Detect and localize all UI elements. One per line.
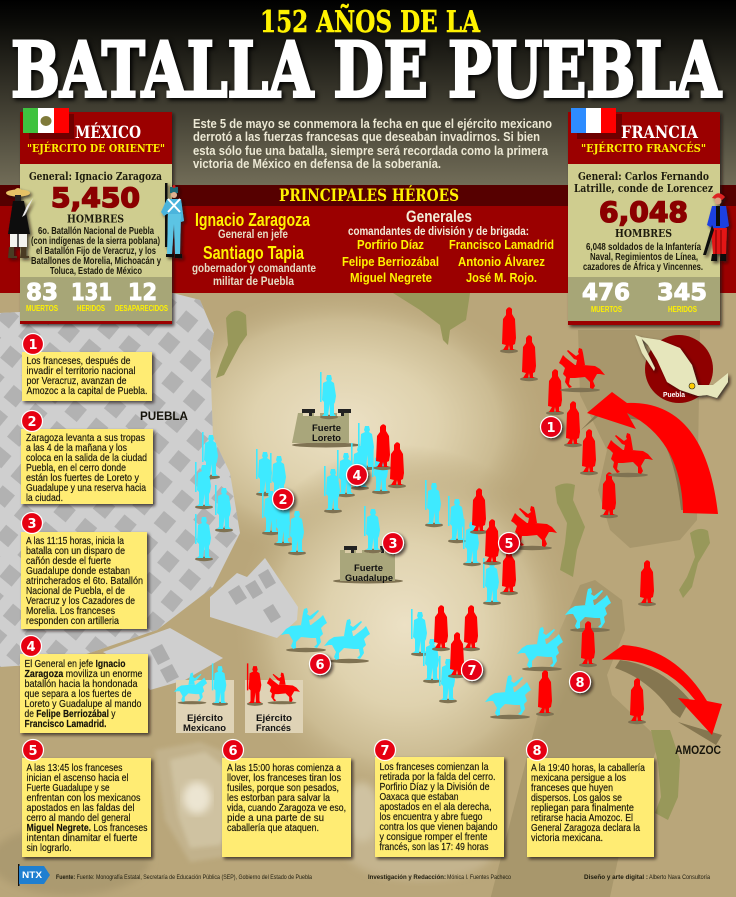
arrow: French advance (587, 392, 718, 514)
panel: México (6, 108, 184, 324)
heroes left column: gobernador y comandante (192, 263, 316, 275)
step 6: vida, cuando Zaragoza ve eso, (227, 802, 346, 814)
step 6: caballería que ataquen. (227, 822, 319, 834)
troop count: 6,048 (599, 196, 688, 228)
green vegetation patches (216, 293, 710, 820)
map number markers: 7 (467, 664, 477, 679)
step 3: Veracruz y los Cazadores de (26, 595, 135, 607)
map number markers: 5 (504, 537, 514, 552)
mini map: Puebla location (635, 335, 728, 403)
step 6: llover, los franceses tiran los (227, 772, 341, 784)
panel: México: HOMBRES (67, 212, 124, 226)
step 6: pide a una parte de su (227, 812, 324, 824)
step 3: batalla con un disparo de (26, 545, 125, 557)
step 4: Zaragoza moviliza un enorme (24, 668, 143, 680)
Francia heading (581, 123, 706, 155)
fort: Loreto (292, 409, 360, 448)
casualty stats: 12 (128, 280, 157, 306)
step 4: Francisco Lamadrid. (24, 718, 107, 730)
step 8: retirarse hacia Amozoc. El (531, 812, 633, 824)
step 4: 4 (26, 640, 36, 655)
step 4: Loreto y Guadalupe al mando (24, 698, 142, 710)
heroes left column: Santiago Tapia (203, 243, 305, 263)
mini map: Puebla location: Puebla (663, 392, 685, 399)
step 4 (20, 636, 148, 733)
legend: Ejército Francés: Ejército (256, 713, 292, 724)
Francia heading: FRANCIA (621, 123, 699, 143)
step 1: invadir el territorio nacional (26, 365, 136, 377)
panel: principales héroes band (0, 185, 736, 293)
step 7: los encuentra y abre fuego (380, 811, 483, 823)
step 5: 5 (28, 744, 38, 759)
step 7: 7 (380, 744, 390, 759)
step 5: apostados en las faldas del (26, 802, 134, 814)
fort: Guadalupe: Fuerte (354, 563, 383, 574)
battalion description: Batallones de Morelia, Michoacán y (31, 255, 161, 267)
battalion description: el Batallón Fijo de Veracruz, y los (36, 245, 156, 257)
French army figures (374, 307, 656, 724)
México heading: "EJÉRCITO DE ORIENTE" (27, 141, 165, 155)
fort: Loreto: Fuerte (312, 423, 341, 434)
map number markers: 8 (575, 676, 585, 691)
regiment description: Naval, Regimientos de Línea, (590, 251, 698, 263)
step 4: que separa a los fuertes de (24, 688, 132, 700)
step 3: Guadalupe donde estaban (26, 565, 130, 577)
icon: French flag (571, 108, 622, 139)
step 4: de Felipe Berriozábal y (24, 708, 116, 720)
step 2 (21, 410, 153, 504)
generals list: Generales (406, 207, 472, 226)
Mexican army figures (195, 372, 611, 719)
troop count: 5,450 (51, 183, 140, 214)
step 5 (22, 740, 151, 857)
icon: Mexican infantry soldier (161, 183, 184, 258)
battalion description (31, 225, 161, 277)
step 5: Fuerte Guadalupe y se (26, 782, 110, 794)
step 6: fusiles, porque son pesados, (227, 782, 339, 794)
casualty stats: DESAPARECIDOS (115, 304, 169, 313)
step 1: 1 (28, 338, 38, 353)
map number markers: 3 (388, 537, 398, 552)
step 8: 8 (532, 744, 542, 759)
step 7 (374, 740, 504, 857)
generals list: Antonio Álvarez (458, 254, 545, 269)
heading: principales héroes: PRINCIPALES HÉROES (279, 185, 459, 206)
step 2: coloca en la salida de la ciudad (26, 452, 147, 464)
step 3: Nacional de Puebla, el de (26, 585, 125, 597)
title: 152 AÑOS DE LA (260, 4, 481, 40)
battalion description: Toluca, Estado de México (50, 265, 142, 277)
icon: Mexican flag (23, 108, 74, 139)
fort: Guadalupe (333, 546, 403, 584)
step 4: batallón hacia la hondonada (24, 678, 138, 690)
panel: Francia (568, 108, 729, 325)
credits footer: Investigación y Redacción: (368, 875, 446, 881)
intro text: derrotó a las fuerzas francesas que deseaban invadirnos. Si bien (193, 129, 540, 144)
legend: Ejército Mexicano: Ejército (187, 713, 223, 724)
intro text: esta sólo fue una batalla, siempre será recordada como la primera (193, 143, 549, 158)
legend: Ejército Mexicano (174, 663, 234, 734)
legend: Ejército Francés: Francés (256, 723, 291, 734)
French general (574, 169, 713, 195)
battalion description: (con indígenas de la sierra poblana) (31, 235, 160, 247)
heroes left column (192, 210, 316, 288)
map number markers: 6 (315, 658, 325, 673)
casualty stats: 476 (582, 280, 630, 306)
arrow shadows (581, 405, 722, 745)
heroes left column: militar de Puebla (213, 276, 295, 288)
generals list: José M. Rojo. (466, 270, 537, 285)
casualty stats: 131 (71, 280, 112, 306)
map label: Amozoc: AMOZOC (675, 743, 721, 757)
casualty stats: HERIDOS (77, 304, 106, 313)
step 8: A la 19:40 horas, la caballería (531, 762, 645, 774)
México heading (27, 122, 165, 155)
casualty stats (26, 280, 169, 313)
credits footer: Fuente: Fuente: Monografía Estatal, Secretaría de Educación Pública (SEP), Gobierno del Estado de Puebla (56, 875, 313, 881)
generals list (342, 207, 554, 285)
fort: Guadalupe: Guadalupe (345, 573, 393, 584)
step 8 (526, 740, 654, 857)
arrow: French retreat to Amozoc (602, 645, 722, 735)
step 3: A las 11:15 horas, inicia la (26, 535, 124, 547)
step 4: El General en jefe Ignacio (24, 658, 126, 670)
step 7: Los franceses comienzan la (380, 761, 489, 773)
step 3: cañón desde el fuerte (26, 555, 111, 567)
intro text (193, 116, 552, 171)
step 2: 2 (27, 415, 37, 430)
step 1: por Veracruz, avanzan de (26, 375, 127, 387)
panel: Francia: HOMBRES (615, 226, 672, 240)
step 7: Porfirio Díaz y la División de (380, 781, 490, 793)
logo: NTX: NTX (22, 870, 42, 880)
step 3 (21, 512, 147, 629)
heroes left column: General en jefe (218, 229, 288, 241)
step 7: apostados en el ala derecha, (380, 801, 492, 813)
step 7: Oaxaca que estaban (380, 791, 459, 803)
Francia heading: "EJÉRCITO FRANCÉS" (581, 141, 706, 155)
step 8: mexicana persigue a los (531, 772, 626, 784)
casualty stats: 345 (657, 280, 707, 306)
step 8: victoria mexicana. (531, 832, 603, 844)
step 5: Miguel Negrete. Los franceses (26, 822, 148, 834)
intro text: Este 5 de mayo se conmemora la fecha en que el ejército mexicano (193, 116, 552, 131)
credits footer (56, 875, 711, 881)
México heading: MÉXICO (75, 122, 141, 143)
step 8: franceses que huyen (531, 782, 613, 794)
map number markers: 4 (352, 469, 362, 484)
fort: Loreto: Loreto (312, 433, 341, 444)
panel: México: General: Ignacio Zaragoza (29, 169, 162, 183)
regiment description (583, 241, 703, 273)
step 7: y consigue romper el frente (380, 831, 488, 843)
battalion description: 6o. Batallón Nacional de Puebla (38, 225, 154, 237)
step 1: Los franceses, después de (26, 355, 131, 367)
generals list: Miguel Negrete (350, 270, 432, 285)
generals list: Francisco Lamadrid (449, 237, 554, 252)
step 6: A las 15:00 horas comienza a (227, 762, 341, 774)
city of Puebla blocks (0, 293, 298, 690)
step 5: intentan dinamitar el fuerte (26, 832, 138, 844)
generals list: Felipe Berriozábal (342, 254, 439, 269)
map label: Puebla: PUEBLA (140, 409, 188, 423)
step 1 (22, 334, 152, 401)
step 5: cerro al mando del general (26, 812, 130, 824)
step 2: Puebla, en el cerro donde (26, 462, 126, 474)
map number markers (272, 416, 590, 692)
step 6: 6 (228, 744, 238, 759)
regiment description: 6,048 soldados de la Infantería (586, 241, 701, 253)
generals list: Porfirio Díaz (357, 237, 424, 252)
step 6 (222, 740, 351, 857)
step 3: atrincherados el 6to. Batallón (26, 575, 143, 587)
step 8: dispersos. Los galos se (531, 792, 622, 804)
casualty stats: 83 (26, 280, 58, 306)
map number markers: 1 (546, 421, 556, 436)
step 3: responden con artilleria (26, 615, 119, 627)
heroes left column: Ignacio Zaragoza (195, 210, 311, 230)
icon: charro soldier (6, 188, 33, 258)
credits footer: Alberto Nava Consultoría (649, 875, 711, 881)
casualty stats: MUERTOS (26, 304, 59, 313)
step 2: Zaragoza levanta a sus tropas (26, 432, 145, 444)
casualty stats: HERIDOS (668, 305, 698, 314)
step 7: francés, son las 17: 49 horas (380, 841, 488, 853)
step 5: enfrentan con los mexicanos (26, 792, 140, 804)
casualty stats (582, 280, 707, 314)
credits footer: Mónica I. Fuentes Pacheco (447, 875, 512, 881)
header background (0, 0, 736, 186)
step 3: Morelia. Los franceses (26, 605, 115, 617)
step 2: están los fuertes de Loreto y (26, 472, 140, 484)
credits footer: Diseño y arte digital : (584, 875, 648, 881)
step 8: repliegan para finalmente (531, 802, 634, 814)
logo: NTX (18, 864, 50, 886)
step 2: la ciudad. (26, 492, 63, 504)
step 7: retirada por la falda del cerro. (380, 771, 496, 783)
casualty stats: MUERTOS (591, 305, 623, 314)
step 5: A las 13:45 los franceses (26, 762, 122, 774)
step 2: a las 4 de la mañana y los (26, 442, 127, 454)
legend: Ejército Mexicano: Mexicano (183, 723, 226, 734)
intro text: victoria de México en defensa de la soberanía. (193, 156, 441, 171)
step 5: sin lograrlo. (26, 842, 72, 854)
step 5: inician el ascenso hacia el (26, 772, 128, 784)
step 6: les estorban para salvar la (227, 792, 330, 804)
generals list: comandantes de división y de brigada: (348, 226, 529, 238)
legend: Ejército Francés (245, 663, 303, 734)
map number markers: 2 (278, 493, 288, 508)
step 7: contra los que vienen bajando (380, 821, 498, 833)
step 2: Guadalupe y una reserva hacia (26, 482, 146, 494)
step 8: General Zaragoza declara la (531, 822, 640, 834)
step 3: 3 (27, 517, 37, 532)
icon: zouave soldier (703, 193, 729, 261)
step 1: Amozoc a la capital de Puebla. (26, 385, 148, 397)
